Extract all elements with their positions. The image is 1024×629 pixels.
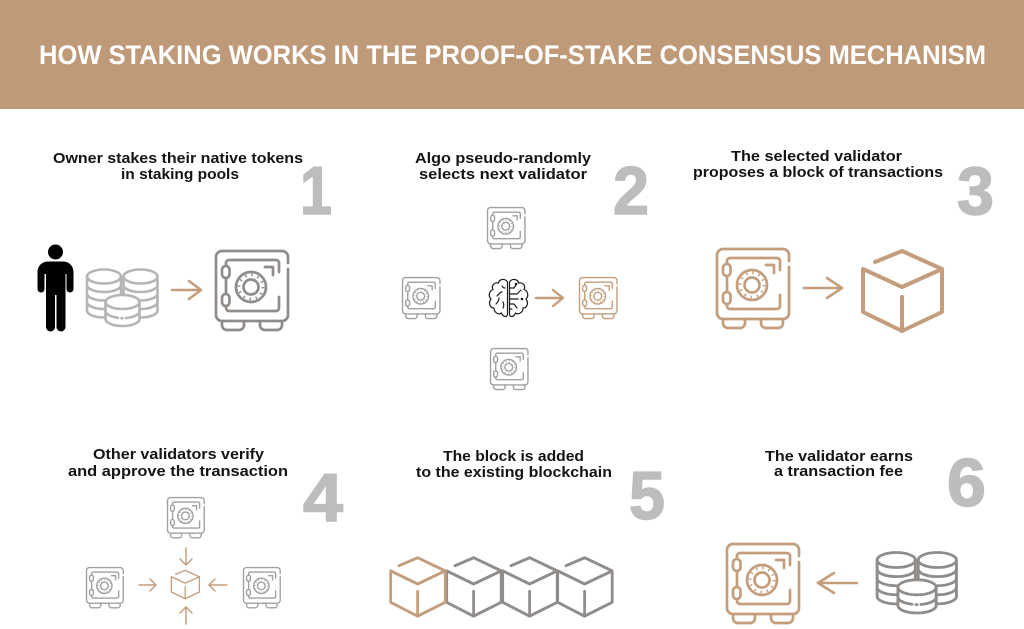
icon: chain block 2 — [447, 558, 501, 616]
panel: step 5 block added to chain — [391, 448, 665, 616]
header banner — [0, 0, 1024, 109]
number 6: 6 — [947, 445, 986, 521]
icon: safe — [216, 251, 288, 330]
icon: safe left — [87, 568, 123, 608]
number 5: 5 — [629, 458, 665, 534]
arrow right — [139, 579, 156, 591]
icon: block — [171, 570, 199, 599]
icon: coin stacks — [87, 270, 158, 326]
icon: chain block 4 — [558, 558, 612, 616]
icon: coin stacks — [877, 553, 956, 613]
panel: step 3 validator proposes block — [693, 148, 994, 331]
arrow — [536, 290, 563, 306]
panel: step 6 validator earns fee — [727, 445, 986, 623]
heading: step 4 caption: and approve the transaction — [68, 463, 288, 480]
heading: step 5 caption: The block is added — [443, 448, 584, 465]
heading: step 3 caption: proposes a block of transactions — [693, 164, 943, 181]
icon: safe top — [488, 208, 525, 249]
number 3: 3 — [957, 153, 994, 229]
number 2: 2 — [613, 153, 649, 229]
heading: step 4 caption: Other validators verify — [93, 446, 265, 463]
heading: step 6 caption: The validator earns — [765, 448, 913, 465]
arrow up — [180, 607, 192, 624]
icon: safe left — [403, 278, 440, 319]
number 1: 1 — [300, 153, 332, 229]
panel: step 2 algorithm selects validator — [403, 150, 649, 390]
icon: safe bottom — [491, 349, 528, 390]
panel: step 4 validators verify — [68, 446, 343, 624]
icon: person — [38, 244, 74, 332]
heading: step 1 caption: Owner stakes their native tokens — [53, 150, 303, 167]
heading: step 6 caption: a transaction fee — [774, 463, 903, 480]
arrow — [172, 281, 201, 299]
icon: chain block 3 — [503, 558, 557, 616]
heading: step 2 caption: Algo pseudo-randomly — [415, 150, 592, 167]
heading: step 1 caption: in staking pools — [121, 166, 239, 183]
title: HOW STAKING WORKS IN THE PROOF-OF-STAKE CONSENSUS MECHANISM — [39, 40, 986, 70]
icon: selected safe — [580, 278, 617, 319]
icon: safe top — [168, 498, 204, 538]
arrow left — [209, 579, 227, 591]
number 4: 4 — [303, 460, 343, 536]
icon: block — [863, 251, 942, 331]
icon: safe — [717, 249, 789, 328]
heading: step 3 caption: The selected validator — [731, 148, 902, 165]
arrow down — [180, 548, 192, 565]
arrow — [818, 573, 857, 593]
panel: step 1 owner stakes tokens — [38, 150, 332, 332]
icon: new block — [391, 558, 445, 616]
icon: brain — [489, 279, 528, 317]
arrow — [804, 278, 842, 298]
heading: step 2 caption: selects next validator — [419, 166, 587, 183]
icon: safe right — [244, 568, 280, 608]
icon: safe — [727, 544, 799, 623]
heading: step 5 caption: to the existing blockchain — [416, 464, 612, 481]
